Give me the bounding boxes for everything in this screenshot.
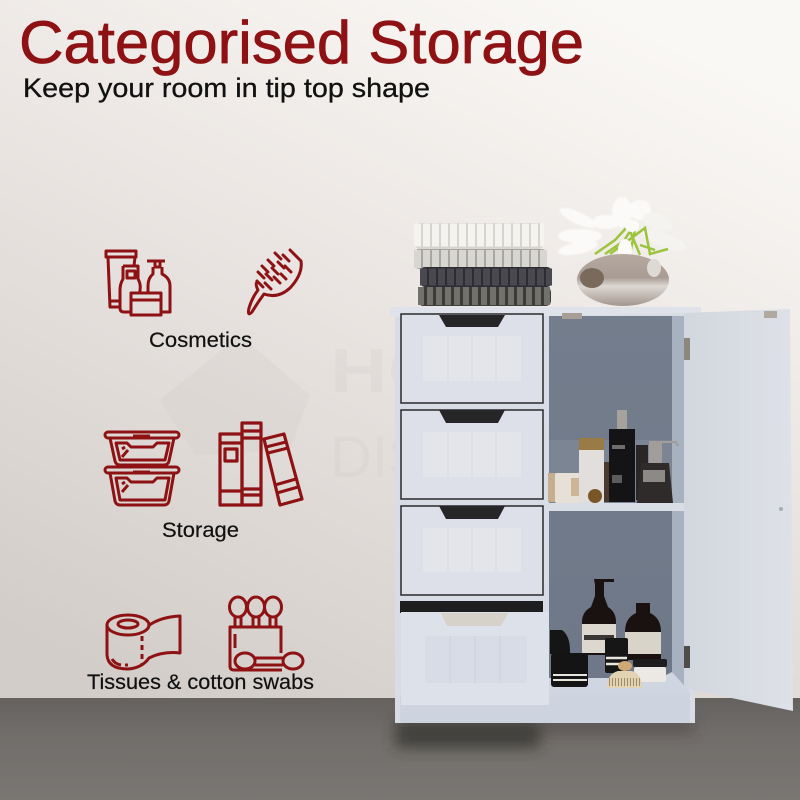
candle	[555, 473, 580, 503]
watermark	[160, 335, 556, 490]
interior floor	[549, 672, 690, 695]
label: tissues and cotton swabs: Tissues & cotton swabs	[87, 671, 314, 694]
drawer 4 open	[400, 601, 549, 705]
label: cosmetics: Cosmetics	[149, 329, 252, 352]
drawer 1	[401, 314, 543, 403]
dark stand	[550, 630, 570, 654]
black pump bottle	[609, 429, 635, 502]
amber round bottle	[625, 603, 661, 660]
title: Categorised Storage	[19, 9, 584, 76]
subtitle: Keep your room in tip top shape	[23, 73, 430, 103]
cabinet body	[395, 312, 695, 723]
icon: stacked storage containers	[105, 432, 179, 505]
striped jar	[551, 653, 588, 687]
lower shelf bottles	[550, 579, 667, 688]
plinth	[400, 695, 690, 723]
panel: cabinet	[390, 307, 793, 723]
icon: books	[220, 423, 302, 505]
icon: cosmetics bottles	[106, 251, 170, 315]
icon: hair brush	[248, 250, 301, 314]
grey soap dispenser	[636, 445, 648, 500]
gold cap bottle	[579, 438, 604, 503]
shelf	[549, 503, 684, 511]
towels stack	[414, 223, 552, 306]
cabinet top	[390, 307, 701, 317]
leaves	[595, 222, 668, 255]
small jar	[605, 638, 628, 673]
flower vase	[557, 197, 689, 306]
watermark: DISCOU	[330, 425, 556, 490]
flowers	[557, 197, 689, 258]
vase body	[577, 254, 669, 306]
amber pump bottle	[582, 579, 616, 655]
door	[684, 309, 793, 711]
drawer 2	[401, 410, 543, 499]
cabinet interior	[549, 316, 685, 690]
top hinge plate	[562, 313, 582, 319]
white jar	[633, 659, 667, 667]
drawer 3	[401, 506, 543, 595]
floor shadow	[395, 720, 695, 748]
floor	[0, 698, 800, 800]
watermark: HO	[330, 337, 450, 406]
label: storage: Storage	[162, 519, 239, 542]
upper shelf bottles	[548, 410, 678, 503]
icon: toilet roll	[107, 615, 180, 669]
icon: cotton swabs	[230, 597, 303, 670]
bristle brush	[607, 661, 642, 688]
